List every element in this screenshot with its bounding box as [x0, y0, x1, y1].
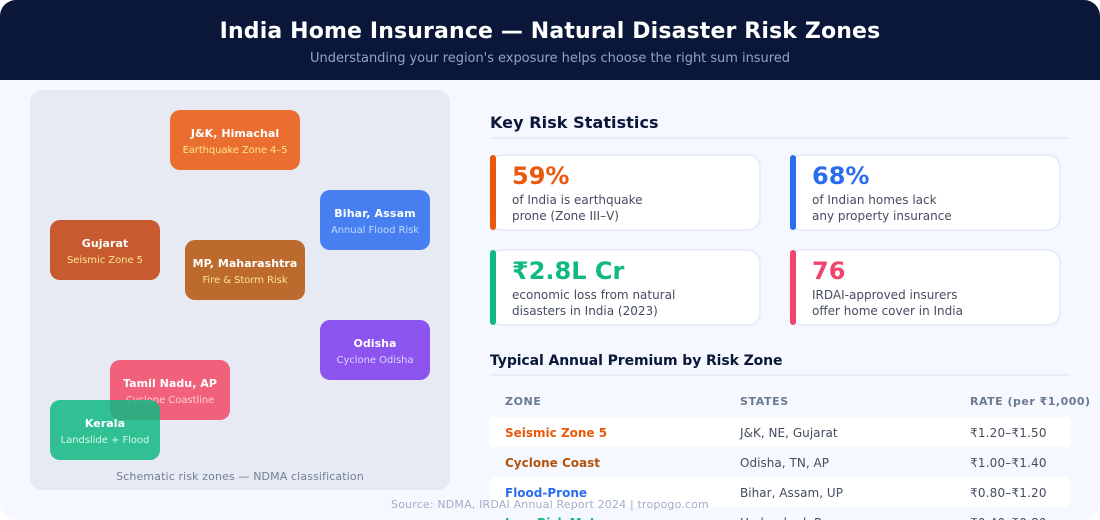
row: cyclone coast: ₹1.00–₹1.40: [970, 456, 1047, 470]
row: cyclone coast: Cyclone Coast: [505, 456, 600, 470]
row: seismic zone 5: Seismic Zone 5: [505, 426, 607, 440]
zone: Tamil Nadu, AP: Cyclone Coastline: [126, 395, 214, 406]
table header row: [505, 395, 1091, 408]
zone: MP, Maharashtra: MP, Maharashtra: [193, 257, 297, 270]
premium table: [490, 395, 1091, 520]
stat card: 59%: of India is earthquake: [512, 193, 643, 207]
title: India Home Insurance — Natural Disaster Risk Zones: [220, 19, 880, 44]
row: cyclone coast: Odisha, TN, AP: [740, 456, 829, 470]
zone: Bihar, Assam: [320, 190, 430, 250]
heading: key risk statistics: [490, 113, 1070, 139]
table header row: ZONE: [505, 395, 541, 408]
source footnote: Source: NDMA, IRDAI Annual Report 2024 | tropogo.com: [391, 498, 709, 511]
zone: J&K, Himachal: J&K, Himachal: [191, 127, 279, 140]
zone: MP, Maharashtra: Fire & Storm Risk: [202, 275, 288, 286]
stat card: 2.8L Cr: economic loss from natural: [512, 288, 675, 302]
stat card: 76: offer home cover in India: [812, 304, 963, 318]
stat card: 2.8L Cr: ₹2.8L Cr: [512, 257, 624, 285]
zone: Odisha: [320, 320, 430, 380]
row: flood-prone: ₹0.80–₹1.20: [970, 486, 1047, 500]
stat card: 76: [789, 249, 1061, 326]
zone: Kerala: Kerala: [85, 417, 125, 430]
table header row: RATE (per ₹1,000): [970, 395, 1091, 408]
stat card: 2.8L Cr: disasters in India (2023): [512, 304, 658, 318]
heading: key risk statistics: Key Risk Statistics: [490, 113, 659, 132]
zone: Odisha: Cyclone Odisha: [337, 355, 413, 366]
zone: Tamil Nadu, AP: Tamil Nadu, AP: [123, 377, 217, 390]
row: flood-prone: [490, 477, 1070, 507]
zone: MP, Maharashtra: [185, 240, 305, 300]
panel: risk zone map: [30, 90, 450, 490]
zone: Odisha: Odisha: [353, 337, 397, 350]
zone: Tamil Nadu, AP: [110, 360, 230, 420]
stat card: 59%: 59%: [512, 162, 569, 190]
row: low-risk metro: [505, 516, 1047, 520]
stat card: 68%: any property insurance: [812, 209, 952, 223]
zone: Kerala: [50, 400, 160, 460]
table header row: STATES: [740, 395, 789, 408]
zone: Bihar, Assam: Annual Flood Risk: [331, 225, 419, 236]
row: flood-prone: Bihar, Assam, UP: [740, 486, 843, 500]
row: flood-prone: Flood-Prone: [505, 486, 587, 500]
stat card: 68%: of Indian homes lack: [812, 193, 937, 207]
row: cyclone coast: [505, 456, 1047, 470]
zone: Gujarat: [50, 220, 160, 280]
row: seismic zone 5: J&K, NE, Gujarat: [740, 426, 838, 440]
stat card: 59%: [489, 154, 761, 231]
header: [0, 0, 1100, 80]
subtitle: Understanding your region's exposure helps choose the right sum insured: [310, 51, 790, 66]
zone: J&K, Himachal: Earthquake Zone 4–5: [183, 145, 287, 156]
heading: typical annual premium: Typical Annual Premium by Risk Zone: [490, 353, 782, 369]
stat card: 59%: prone (Zone III–V): [512, 209, 619, 223]
stat card: 76: IRDAI-approved insurers: [812, 288, 958, 302]
stat card: 68%: [789, 154, 1061, 231]
stat card: 76: 76: [812, 257, 845, 285]
stat card: 2.8L Cr: [489, 249, 761, 326]
heading: typical annual premium: [490, 351, 1070, 376]
zone: Bihar, Assam: Bihar, Assam: [334, 207, 416, 220]
zone: Gujarat: Seismic Zone 5: [67, 255, 143, 266]
map caption: Schematic risk zones — NDMA classification: [116, 470, 364, 483]
stat card: 68%: 68%: [812, 162, 869, 190]
zone: Gujarat: Gujarat: [82, 237, 128, 250]
row: seismic zone 5: [490, 417, 1070, 447]
zone: Kerala: Landslide + Flood: [61, 435, 149, 446]
row: seismic zone 5: ₹1.20–₹1.50: [970, 426, 1047, 440]
zone: J&K, Himachal: [170, 110, 300, 170]
